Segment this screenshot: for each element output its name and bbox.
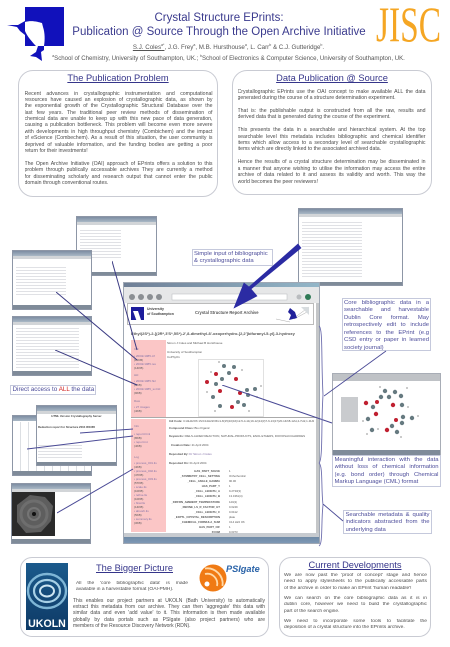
table: crystallographic parameters: _CELL_LENGTH_B [194,494,220,498]
text: structure metadata: Keywords: DIELS-ALDER REACTION, NATURAL-PRODUCTS, ENOL ETHERS, DIOXOSACCHARIDES [169,434,305,438]
screenshot: main crystal structure report archive browser [123,282,320,544]
label: simple input [192,249,273,266]
text: publication problem body: Recent advances in crystallographic instrumentation and computational [24,90,212,96]
text: current developments body: deposition of a crystal structure into the EPrints archive. [284,625,405,630]
text: data publication body: This presents the data in a searchable and hierarchical system. At the top [238,127,426,133]
logo: UKOLN [26,563,68,630]
table: crystallographic parameters: 13.4361(4) [229,494,243,498]
label: simple input: & crystallographic data [194,258,254,264]
text: bigger picture body: extract this metadata from our archive. They can then 'aggregate' this data with [73,604,265,610]
screenshot: data listing two [12,316,92,376]
table: crystallographic parameters: HAS_PART_SOLVE [194,469,220,473]
label: core bibliographic data: Core bibliographic data in a [344,300,429,306]
label: searchable metadata: indicators abstracted from the [346,519,430,525]
arrow: table window to link [27,436,133,450]
text: archive title: Crystal Structure Report Archive [195,310,259,315]
text: publication problem body: with developments in high throughput chemistry (Combichem) and the impact [24,129,212,135]
label: meaningful interaction: Markup Language (CML) format [334,479,418,485]
arrow: form to cif link [112,260,138,350]
text: publication problem body: of eScience (Combechem). As a result of this situation, the user community is [24,135,212,141]
arrow: big arrow from form to banner [234,244,302,308]
label: direct access: Direct access to ALL the data [12,386,94,393]
browser scrollbar [316,303,319,533]
sidebar: pink link column [131,340,166,532]
text: data publication body: world becomes the peer reviewers! [238,179,318,185]
label: meaningful interaction: Meaningful interaction with the data [334,456,438,462]
heading: data publication at source: Data Publication @ Source [276,73,388,83]
text: data publication body: a manner that anyone wishing to utilise the information may access the entire [238,166,426,172]
arrow: report window to link [80,428,133,434]
text: current developments body: We need to incorporate some tools to facilitate the [284,619,427,624]
label: core bibliographic data: Dublin Core format. May [344,314,429,320]
authors: S.J. Colesa*, J.G. Freya, M.B. Hursthousea, L. Carrb & C.J. Gutteridgeb. [133,43,324,51]
panel: the bigger picture [20,557,269,637]
table: crystallographic parameters: 120(2) [229,500,237,504]
text: PSIgate logo: PSIgate [226,564,260,574]
heading: the publication problem: The Publication Problem [67,73,169,83]
text: bigger picture body: similar data and even 'add value' to it. This information is then made available [73,610,265,616]
title [72,12,366,38]
text: data publication body: searchable level this metadata includes bibliographic and chemical identifier [238,134,426,140]
text: bigger picture body: globally by data portals such as PSIgate (also project partners) who are [73,617,265,623]
text: compound name: Ethyl(2S*)-2-[(2R*,3'S*,5S*)-2',8-dimethyl-8'-oxoperhydro-[2,2']bifuranyl-5-yl]-3-hydroxy [131,331,295,336]
text: bigger picture body [73,598,265,629]
table: crystallographic parameters: 0.0249 [229,505,238,509]
brace: upper record section [318,326,324,463]
text: data publication body: That is: the publishable output is constructed from all the raw, results and [238,108,426,114]
table: crystallographic parameters: 1 [229,484,231,488]
text: publication problem body: resources have caused an explosion of crystallographic data, as shown by [24,97,212,103]
label: core bibliographic data: searchable and harvestable [344,307,429,313]
screenshot: front report window [36,405,117,466]
text: data publication body: Hence the results of a crystal structure determination may be disseminated in [238,159,426,165]
table: crystallographic parameters: Orthorhombic [229,474,246,478]
label: searchable metadata [343,510,432,534]
heading: current developments: Current Developments [308,560,402,570]
text: publication problem body: chemical data are unable to keep up with this new pace of data generation, [24,116,212,122]
arrow: data listing one to link [56,292,138,360]
text: data publication body: derived data that is generated during the course of the experiment. [238,114,391,120]
logo: dolphin [7,7,64,61]
label: meaningful interaction [332,455,441,487]
table: crystallographic parameters: _DIFFRN_AMBIENT_TEMPERATURE [171,500,220,504]
table: crystallographic parameters: 9.2733(3) [229,489,241,493]
table: crystallographic parameters: _CELL_ANGLE_GAMMA [187,479,220,483]
screenshot: data listing one [12,250,92,310]
connector: brace to searchable label [323,504,344,522]
label: direct access [10,385,96,395]
label: core bibliographic data: retrospectively edit to include [344,322,429,328]
panel: the publication problem [18,70,218,197]
text: publication problem body [24,90,212,186]
screenshot: bibliographic entry form [298,208,403,286]
table: crystallographic parameters: HAS_PART_CIF [199,525,220,529]
text: bigger picture body: This enables our project partners at UKOLN (Bath University) to automatically [73,598,265,604]
table: crystallographic parameters [171,469,246,534]
table: crystallographic parameters: 1 [229,525,231,529]
text: university of southampton: of Southampton [147,312,174,316]
screenshot: diffraction image window [11,483,91,544]
text: bigger picture body: members of the Resource Discovery Network (RDN). [73,623,191,629]
text: current developments body: We are now past the 'proof of concept' stage and hence [284,573,427,578]
table: crystallographic parameters: _SYMMETRY_CELL_SETTING [180,474,220,478]
text: authors and affiliation: Simon J Coles and Michael B Hursthouse [167,341,222,345]
text: publication problem body: The Open Archive Initiative (OAI) approach of EPrints offers a solution to this [24,161,212,167]
panel: molecule viewer [198,359,264,417]
text: publication problem body: causing a publication bottleneck. This problem will become even more severe [24,122,212,128]
text: bigger picture intro: available in a harvestable format (OAI-PMH). [76,587,173,592]
label: simple input: Simple input of bibliographic [194,250,268,256]
text: data publication body: archive of data related to it and assess its validity and worth. This way the [238,172,426,178]
screenshot: back table window [12,415,92,476]
table: crystallographic parameters: 1 [229,469,231,473]
icon: university logo [131,307,144,320]
text: authors and affiliation [167,341,222,358]
text: structure metadata [169,419,314,465]
connector: brace to core label [324,350,386,396]
text: structure metadata: Intl Code: C14H22O6 1S/C14H22O6/c1-8(15)10(16)12-5-4-11(19-12)14(3)7-6-13(17)20-14/h8-12H,4-7H2,1-3H3 [169,419,314,423]
screenshot: top left data page [76,216,157,276]
text: university of southampton [147,307,174,316]
text: bigger picture intro [76,581,188,592]
text: publication problem body: the exponential growth of the Crystallographic Structural Database over the [24,103,212,109]
label: core bibliographic data: society journal) [344,344,384,350]
text: structure metadata: Compound Class: Bio-Organic [169,426,210,430]
label: core bibliographic data: CSD entry or paper in learned [344,337,429,343]
text: structure metadata: Deposited On: 01 April 2004 [169,461,206,465]
table: crystallographic parameters: plate [229,515,235,519]
text: publication problem body: return for their investments! [24,148,88,154]
text: report window heading: HTML Version Crystallography Server [51,414,102,418]
label: meaningful interaction: (e.g. bond order) through Chemical [334,472,438,478]
logo: UKOLN: UKOLN [28,618,66,630]
arrow: data listing two to link [55,350,138,386]
text: publication problem body: for disseminating scholarly and research output that cannot enter the public [24,174,212,180]
text: structure metadata: Deposited By: Dr Simon J Coles [169,452,212,456]
heading: the bigger picture: The Bigger Picture [96,563,173,573]
text: data publication body: Crystallographic EPrints use the OAI concept to make available ALL the data [238,88,426,94]
label: core bibliographic data [342,298,431,351]
title: Crystal Structure EPrints: [154,12,284,24]
text: authors and affiliation: CoPhyOx [167,354,180,358]
icon: PSIgate orange signal [200,564,226,592]
header: archive banner [127,303,314,325]
label: meaningful interaction: without loss of chemical information [334,464,438,470]
text: current developments body: dublin core, however we need to build the crystallographic [284,602,427,607]
text: data publication body: items which allow access to a secondary level of searchable crystallographic [238,140,426,146]
screenshot: main crystal structure report archive browser: 0.0373 [229,530,238,534]
text: current developments body [284,573,427,630]
text: current developments body: of the archive in order to make an EPrint 'human readable'! [284,586,411,591]
table: crystallographic parameters: HAS_PART_Y [202,484,220,488]
table: crystallographic parameters: _CHEMICAL_FORMULA_SUM [180,520,220,524]
brace: lower metadata section [318,463,324,546]
text: data publication body [238,88,426,185]
text: university of southampton: University [147,307,164,311]
table: crystallographic parameters: 0.0412 [229,510,238,514]
image: diffraction pattern [12,492,55,536]
arrow: diffraction image to link [57,468,134,514]
label: searchable metadata: underlying data [346,526,386,532]
affiliations: aSchool of Chemistry, University of Southampton, UK.; bSchool of Electronics & Computer Science, University of Southampton, UK. [52,54,405,62]
text: current developments body: need to apply stylesheets to the publically accessable parts [284,579,427,584]
text: current developments body: We can search on the core bibliographic data as it is in [284,596,427,601]
browser toolbar buttons [129,294,311,300]
panel: data publication at source [232,70,432,195]
screenshot: main crystal structure report archive browser: FCOM [212,530,220,534]
text: publication problem body: domain through conventional routes. [24,180,108,186]
text: publication problem body: deprived of valuable information, and the funding bodies are getting a poor [24,142,212,148]
text: data publication body: items which are directly linked to the associated archived data. [238,146,381,152]
screenshot: molecule viewer window with CML [332,373,441,456]
text: bigger picture intro: All the 'core bibliographic data' is made [76,581,188,586]
label: searchable metadata: Searchable metadata & quality [346,512,430,518]
table: crystallographic parameters: _CELL_LENGTH_A [194,489,220,493]
text: publication problem body: problem through publically accessable archives They are currently a method [24,167,212,173]
text: current developments body: part of the search engine. [284,609,339,614]
text: publication problem body: last few years. The traditional peer review methods of dissemination of [24,110,212,116]
label: core bibliographic data: references to the EPrint (e.g [344,330,429,336]
table: crystallographic parameters: C14 H22 O6 [229,520,245,524]
table: crystallographic parameters: 90.00 [229,479,236,483]
text: authors and affiliation: University of Southampton [167,350,202,354]
table: crystallographic parameters: _CELL_LENGTH_C [194,510,220,514]
title: Publication @ Source Through the Open Archive Initiative [72,26,366,38]
text: data publication body: generated during the course of a structure determination experiment. [238,95,396,101]
arrow: molecule to CML viewer [222,385,332,424]
icon: UK map [276,306,309,322]
table: crystallographic parameters: _EXPTL_CRYSTAL_DESCRIPTION [174,515,220,519]
text: structure metadata: Creation Date: 21 April 2004 [171,443,208,447]
table: crystallographic parameters: _REFINE_LS_R_FACTOR_GT [181,505,220,509]
text: report window subheading: Reduction report for Structure 2004 IR1085 [38,425,95,429]
panel: current developments [279,557,431,637]
browser status and task bar [124,533,319,543]
